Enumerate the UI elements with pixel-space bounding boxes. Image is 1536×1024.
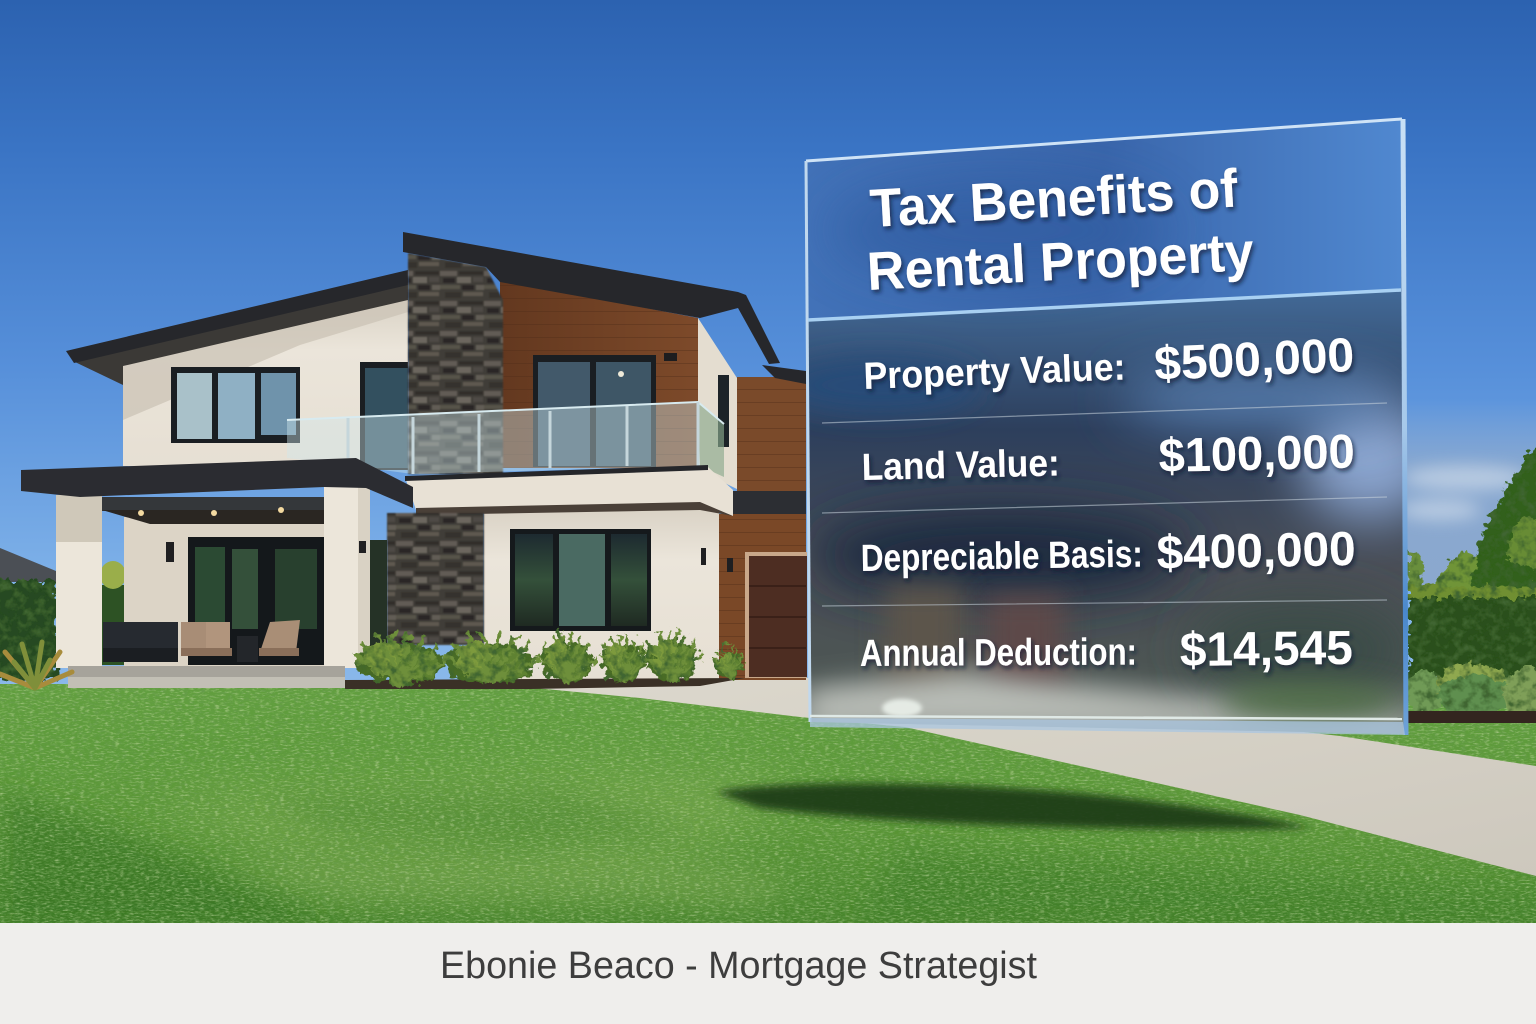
stone tower [408,253,503,474]
upper wall sun shadow [123,299,408,420]
far right wood [737,377,806,492]
balcony glass railing [287,402,724,477]
row: land value: $100,000 [1158,426,1355,483]
balcony base [405,467,733,516]
dark band above garage [732,491,806,514]
header soft highlight [848,189,1136,267]
porch flat roof [21,458,413,508]
balcony door window [533,355,656,467]
large lower window [510,529,651,631]
garage door [745,552,807,678]
lower wood cladding [719,514,806,680]
agave plant [0,642,72,688]
porch glass doors [188,537,324,665]
distant clouds [1400,400,1536,590]
lower stone column [387,513,484,645]
porch dark opening right [370,540,387,665]
side window [718,375,729,447]
panel title: Tax Benefits of [868,158,1240,239]
row: depreciable basis: $400,000 [1156,523,1356,580]
porch columns [56,487,370,668]
row: property value [863,329,1355,398]
trees [1408,442,1536,595]
row: annual deduction [860,622,1353,677]
right mulch [1405,711,1536,723]
upper left window [171,367,300,443]
upper left wall [123,299,408,470]
row: annual deduction: Annual Deduction: [860,632,1137,675]
wall fixture [664,353,677,361]
panel title: Rental Property [865,222,1255,302]
footer band [0,923,1536,1024]
panel frosted body [808,255,1404,734]
right wall [698,318,739,490]
glass panel [804,118,1408,735]
concrete driveway [535,678,1536,876]
lawn [0,684,1536,924]
panel frame [806,119,1406,735]
house [0,232,807,689]
main upper roof [403,232,780,364]
right background trees and hedge [1404,442,1536,723]
hedge [1408,586,1536,676]
row: land value [861,426,1355,489]
porch steps [68,666,345,688]
porch soffit and beam [81,497,324,524]
right bushes [1404,664,1536,720]
front shrubs [352,628,745,684]
left roof soffit [75,284,408,385]
porch furniture [103,620,300,662]
panel title [865,158,1255,302]
row: annual deduction: $14,545 [1179,622,1353,677]
panel header tint [806,119,1402,320]
footer credit: Ebonie Beaco - Mortgage Strategist [440,945,1037,987]
wall lanterns [166,541,733,572]
lower wall [484,508,719,680]
row: property value: $500,000 [1153,329,1355,391]
far right small roof [762,365,806,384]
left roof fascia [66,270,408,363]
upper door window [360,362,408,470]
shrub mulch bed [345,678,745,689]
panel shadow on lawn [715,784,1312,829]
row: property value: Property Value: [863,346,1126,398]
row: depreciable basis [860,523,1356,580]
upper wood cladding [500,280,698,468]
row: land value: Land Value: [861,443,1060,489]
left neighbour house and hedge [0,548,126,680]
porch back wall [124,517,324,667]
row: depreciable basis: Depreciable Basis: [860,534,1143,580]
